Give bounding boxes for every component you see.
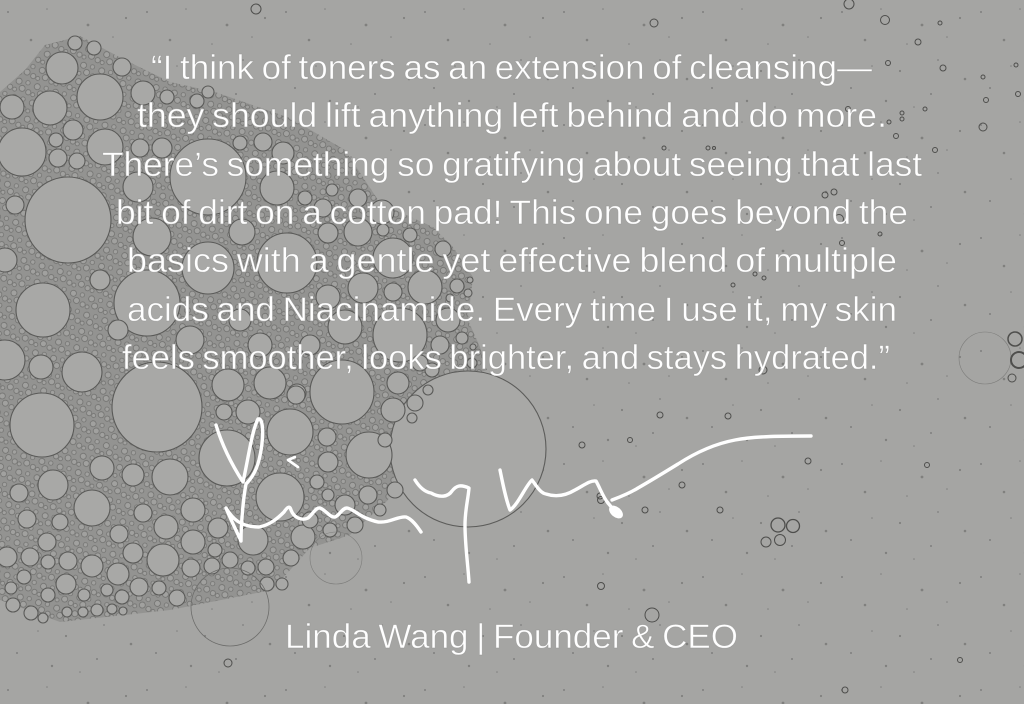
quote text: they should lift anything left behind and do more. — [137, 97, 887, 135]
signature pen blob — [607, 503, 625, 521]
foam mass — [0, 36, 487, 622]
quote text: “I think of toners as an extension of cleansing— — [151, 49, 872, 87]
large bubbles — [0, 36, 477, 623]
scattered ring bubbles — [224, 0, 1024, 693]
quote text — [102, 49, 923, 377]
bubble cluster — [0, 36, 546, 623]
attribution: Linda Wang | Founder & CEO — [285, 618, 738, 656]
signature — [216, 419, 811, 582]
quote text: There’s something so gratifying about seeing that last — [102, 146, 923, 184]
large bubble outline — [390, 371, 546, 527]
quote text: bit of dirt on a cotton pad! This one goes beyond the — [116, 194, 908, 232]
quote text: feels smoother, looks brighter, and stays hydrated.” — [122, 339, 890, 377]
quote text: acids and Niacinamide. Every time I use it, my skin — [127, 291, 897, 329]
quote text: basics with a gentle yet effective blend of multiple — [127, 242, 897, 280]
translucent bubbles — [191, 332, 1011, 646]
